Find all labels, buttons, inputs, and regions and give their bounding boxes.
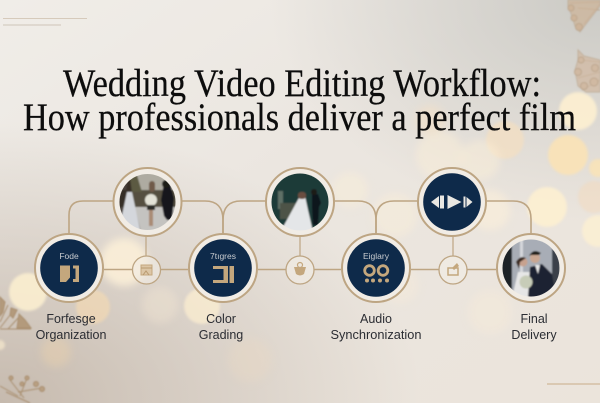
dried flowers: top right (568, 0, 600, 32)
step 1 label: Organization (36, 328, 106, 342)
step 3 label: Audio (360, 312, 392, 326)
connector lines (69, 201, 531, 270)
small icon 1: film frame (132, 256, 160, 284)
step 3 node: Audio Synchronization: Eiglary (363, 251, 390, 261)
step 1 label (36, 312, 106, 342)
photo: bride and groom, dark background (266, 168, 334, 236)
step 2 node: Color Grading (189, 234, 257, 302)
small icon 2: ring pouch (286, 256, 314, 284)
step 2 label: Color (206, 312, 236, 326)
step 4 label: Final (520, 312, 548, 326)
title (23, 61, 576, 139)
icon: playback arrows (431, 195, 472, 209)
title: Wedding Video Editing Workflow: (63, 61, 541, 105)
step 1 label: Forfesge (46, 312, 96, 326)
photo: couple with bouquet (114, 168, 182, 236)
step 4 label: Delivery (511, 328, 557, 342)
step 4 node: photo couple (497, 234, 565, 302)
decorative line: bottom right (547, 383, 600, 385)
step 2 node: Color Grading: 7tıgres (210, 251, 236, 261)
bokeh lights (0, 92, 600, 382)
icon: audio dials (365, 266, 388, 275)
step 1 node: Organization: Fode (59, 251, 79, 261)
icon: grading bars (213, 266, 234, 283)
step 1 node: Organization (35, 234, 103, 302)
icon: folder blocks (60, 266, 79, 282)
step 2 label: Grading (199, 328, 243, 342)
dried flowers: right (574, 50, 600, 92)
step 3 label: Synchronization (330, 328, 422, 342)
small icon 3: edit box (439, 256, 467, 284)
decorative lines: top left (3, 18, 87, 25)
dried flowers: left (0, 297, 31, 329)
node: playback controls (418, 168, 486, 236)
dried flowers: bottom left (0, 376, 44, 403)
step 3 label (330, 312, 422, 342)
step 4 label (511, 312, 557, 342)
step 3 node: Audio Synchronization (342, 234, 410, 302)
step 2 label (199, 312, 243, 342)
